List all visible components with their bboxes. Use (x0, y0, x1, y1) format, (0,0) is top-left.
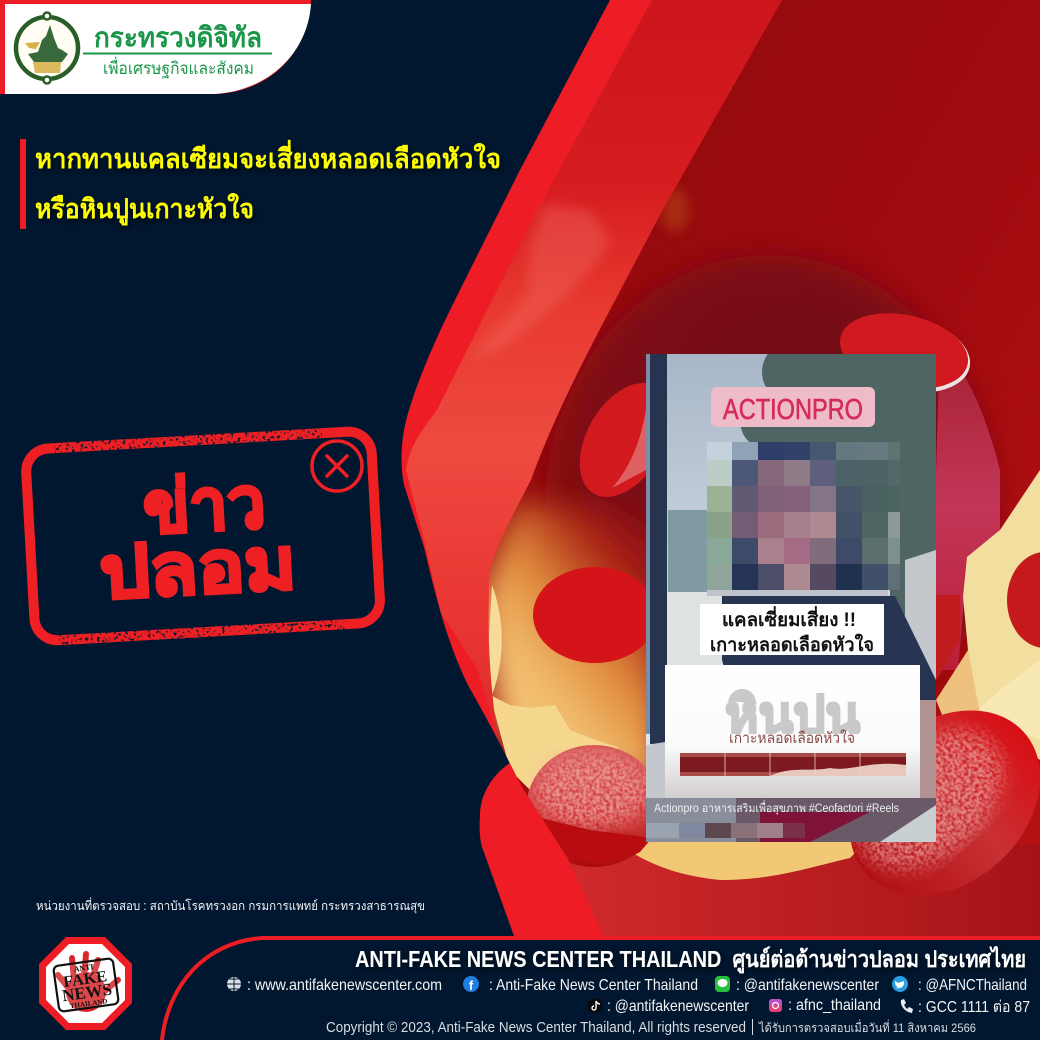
cream left (488, 488, 646, 768)
fence (668, 510, 708, 592)
rbc low left (528, 745, 648, 867)
caption box (700, 604, 884, 656)
icon: ministry emblem (16, 12, 78, 84)
rbc far right (1007, 552, 1040, 648)
right cream (963, 470, 1040, 760)
stamp close icon (312, 441, 362, 491)
floor (560, 845, 1040, 940)
heading (20, 139, 501, 229)
red ribbon (402, 0, 1040, 936)
arm (920, 700, 936, 798)
rbc left (580, 383, 646, 497)
icon: globe (227, 977, 241, 991)
panel: footer (0, 936, 1040, 1040)
icon: facebook (463, 976, 479, 993)
stamp word one: ข่าว (141, 463, 267, 549)
icon: line (715, 976, 730, 992)
light ribbon (406, 0, 782, 740)
vessel interior (480, 0, 1040, 940)
panel: logo badge (0, 0, 311, 94)
source note: หน่วยงานที่ตรวจสอบ : สถาบันโรคทรวงอก กรมการแพทย์ กระทรวงสาธารณสุข (36, 897, 425, 914)
icon: anti fake news stop sign: THAILAND (69, 997, 108, 1010)
rbc mid (533, 567, 657, 663)
stamp word two: ปลอม (98, 524, 298, 614)
panel: blood vessel illustration (402, 0, 1040, 940)
tree (740, 354, 936, 616)
caption box: แคลเซี่ยมเสี่ยง !! (722, 606, 856, 631)
heading: หากทานแคลเซียมจะเสี่ยงหลอดเลือดหัวใจ (35, 139, 501, 174)
stamp: fake news (25, 430, 381, 642)
rbc right (851, 710, 1040, 894)
verification date: ได้รับการตรวจสอบเมื่อวันที่ 11 สิงหาคม 2566 (758, 1019, 976, 1035)
icon: phone (901, 999, 913, 1013)
post caption: Actionpro อาหารเสริมเพื่อสุขภาพ #Ceofactori #Reels (654, 800, 899, 815)
icon: anti fake news stop sign: ANTI (73, 962, 94, 974)
wall below fence (667, 592, 722, 640)
copyright: Copyright © 2023, Anti-Fake News Center Thailand, All rights reserved (326, 1020, 746, 1036)
plaque card (665, 665, 920, 798)
icon: facebook: f (469, 978, 474, 993)
website: : www.antifakenewscenter.com (247, 977, 442, 994)
pale highlight on ribbon (470, 205, 610, 360)
bottom area (736, 798, 936, 842)
icon: anti fake news stop sign (39, 937, 132, 1030)
glow at lumen edge (661, 188, 689, 232)
icon: instagram (769, 999, 782, 1012)
ministry name: กระทรวงดิจิทัล (94, 22, 262, 53)
red wall behind cream (936, 595, 960, 680)
tiktok handle: : @antifakenewscenter (607, 998, 750, 1015)
icon: twitter (892, 976, 908, 992)
artery strip (680, 753, 906, 776)
caption box: เกาะหลอดเลือดหัวใจ (710, 633, 874, 656)
pole (646, 354, 650, 734)
icon: anti fake news stop sign: NEWS (61, 980, 113, 1005)
pink wall (936, 377, 1000, 670)
icon: tiktok (588, 998, 602, 1014)
cream lump (490, 695, 620, 790)
pixelated strip (646, 823, 805, 838)
instagram handle: : afnc_thailand (788, 997, 881, 1014)
rbc top (936, 331, 970, 392)
facebook handle: : Anti-Fake News Center Thailand (489, 977, 698, 994)
lumen (545, 255, 995, 765)
pixelated face (707, 442, 900, 596)
plaque card: เกาะหลอดเลือดหัวใจ (729, 729, 855, 747)
line handle: : @antifakenewscenter (736, 977, 880, 994)
heading: หรือหินปูนเกาะหัวใจ (35, 193, 254, 226)
badge: actionpro (711, 387, 875, 427)
plaque card: หินปูน (725, 687, 860, 748)
ministry subtitle: เพื่อเศรษฐกิจและสังคม (103, 56, 254, 79)
icon: anti fake news stop sign: FAKE (62, 968, 108, 991)
panel: social media screenshot (646, 338, 936, 842)
badge: actionpro: ACTIONPRO (723, 394, 863, 426)
ornate chair (905, 550, 936, 690)
person torso (722, 596, 936, 700)
